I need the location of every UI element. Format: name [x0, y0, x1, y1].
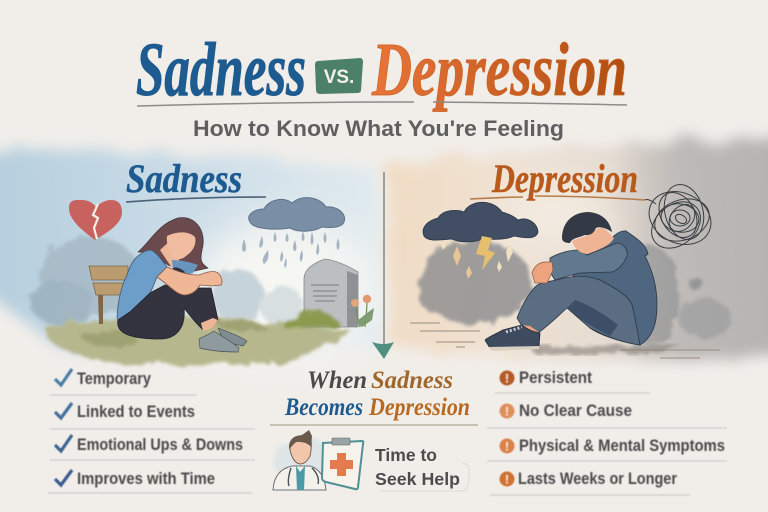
time to seek help: Seek Help: [375, 469, 460, 489]
scene: depression: [410, 156, 731, 358]
title: Depression: [371, 28, 627, 112]
list: sadness traits: [48, 369, 255, 493]
ground: [45, 317, 355, 365]
icon: storm cloud: [423, 202, 538, 242]
man: [485, 212, 680, 354]
time to seek help: Time to: [375, 445, 437, 465]
item: improves with time: Improves with Time: [77, 470, 215, 488]
scene: sadness: [30, 156, 374, 365]
panel wash: depression: [388, 135, 768, 361]
item: persistent: Persistent: [519, 369, 592, 387]
callout: when sadness becomes depression: When: [307, 367, 367, 394]
bush: [285, 312, 340, 328]
icon: clipboard: [322, 438, 363, 489]
title: Sadness: [136, 28, 306, 112]
badge: vs.: VS.: [324, 67, 354, 88]
item: persistent: !: [505, 372, 509, 386]
callout: when sadness becomes depression: Depression: [368, 394, 470, 421]
item: linked to events: Linked to Events: [77, 403, 195, 421]
icon: broken heart: [69, 200, 122, 240]
item: physical and mental symptoms: Physical & Mental Symptoms: [519, 437, 725, 455]
icon: flowers: [351, 295, 374, 327]
item: physical and mental symptoms: !: [505, 440, 509, 454]
icon: rain cloud: [242, 198, 345, 268]
list: depression traits: [487, 369, 727, 495]
woman: [117, 218, 247, 352]
icon: lightning bolt: [476, 236, 495, 270]
smoke: [418, 240, 731, 345]
light patch in sadness sky: [190, 220, 380, 360]
icon: tangled scribble: [640, 180, 720, 258]
pale patch in depression sky: [500, 180, 610, 250]
sadness heading: Sadness: [126, 156, 242, 201]
item: no clear cause: !: [505, 404, 509, 418]
callout: when sadness becomes depression: Sadness: [371, 367, 453, 394]
item: no clear cause: No Clear Cause: [519, 402, 632, 420]
bench: [89, 266, 128, 324]
icon: rain sparks: [441, 240, 513, 279]
time to seek help: [375, 445, 469, 491]
item: temporary: Temporary: [77, 370, 152, 388]
callout: when sadness becomes depression: [270, 367, 478, 425]
panel wash: sadness: [0, 149, 383, 355]
item: emotional ups and downs: Emotional Ups & Downs: [77, 436, 243, 454]
item: lasts weeks or longer: Lasts Weeks or Longer: [518, 470, 677, 488]
callout: when sadness becomes depression: Becomes: [284, 394, 363, 421]
badge: vs.: [315, 58, 363, 94]
divider with arrow: [372, 172, 394, 359]
bushes: [30, 236, 304, 326]
depression heading: Depression: [491, 156, 638, 201]
title: [136, 28, 627, 112]
item: temporary: [55, 369, 152, 388]
icon: gravestone: [304, 259, 358, 327]
title underline: [137, 102, 627, 106]
ground lines: [410, 323, 720, 358]
item: lasts weeks or longer: !: [505, 472, 509, 486]
icon: doctor: [273, 430, 335, 490]
ground shading: [80, 321, 267, 348]
subtitle: How to Know What You're Feeling: [193, 116, 564, 141]
